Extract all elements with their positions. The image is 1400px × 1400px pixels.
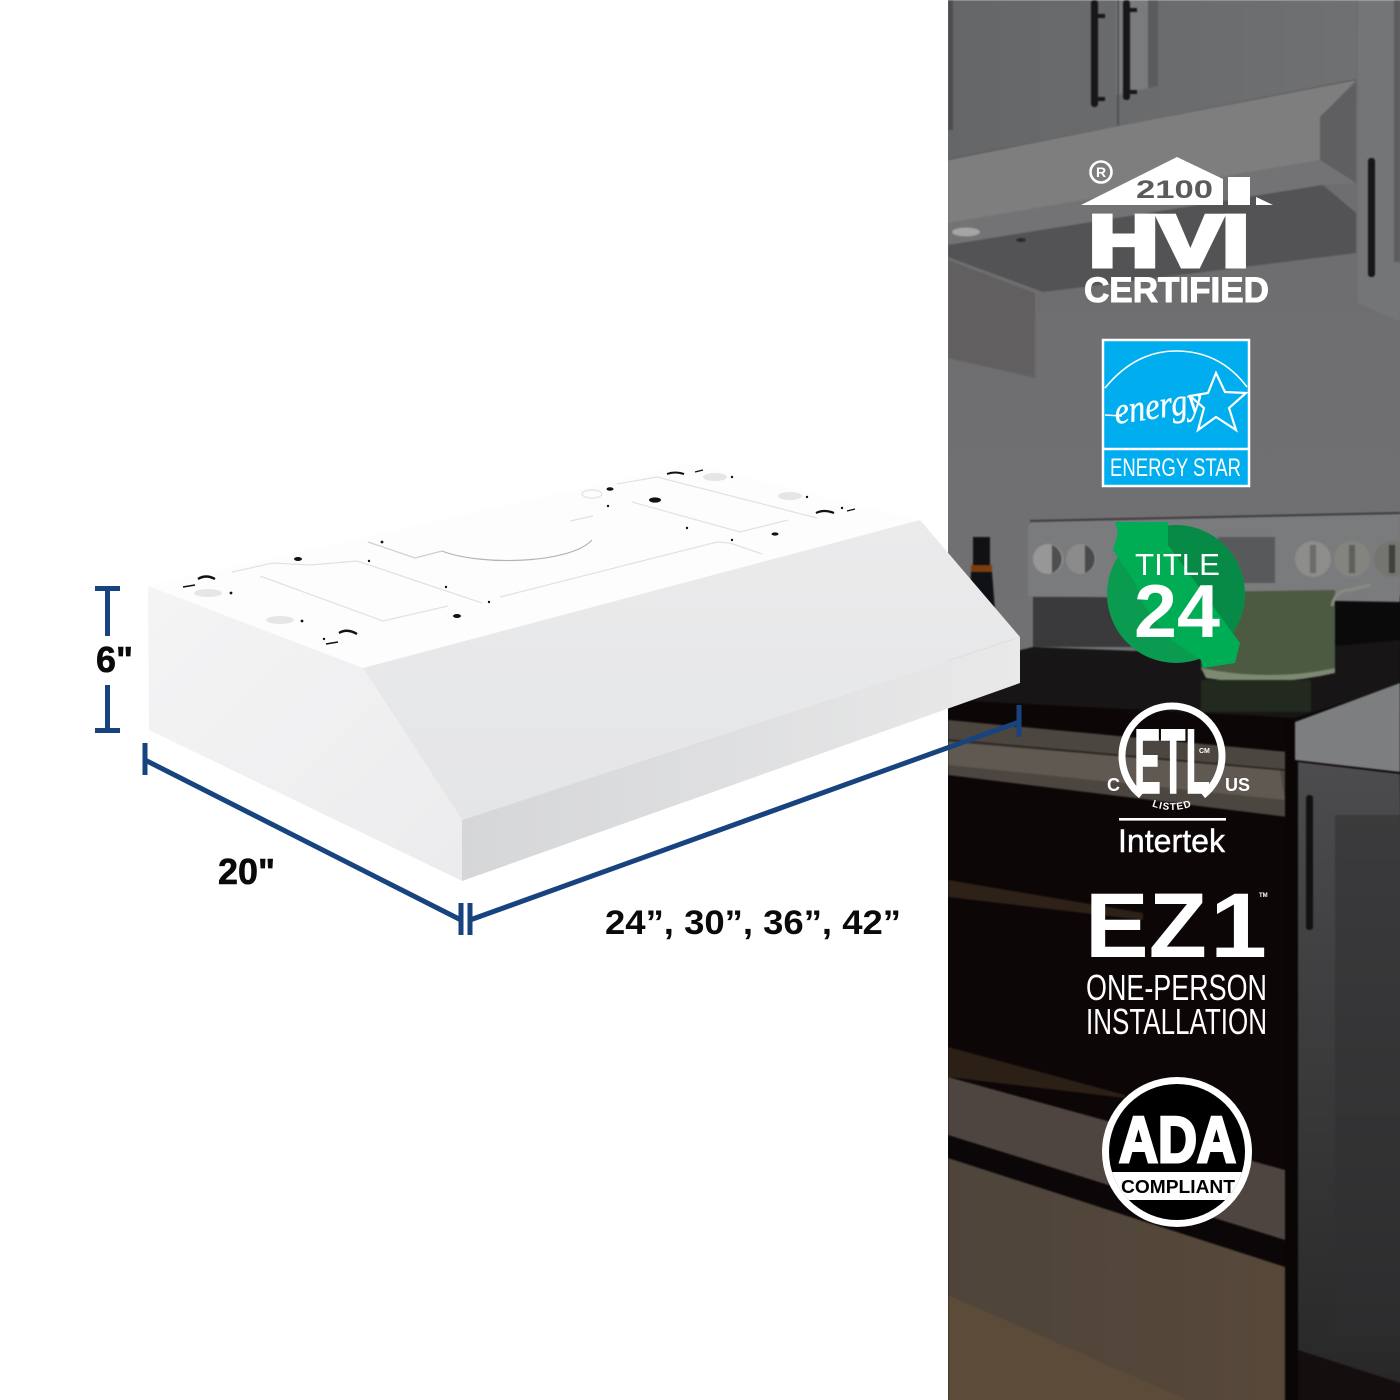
badge: Title 24: TITLE xyxy=(1135,547,1220,582)
oven window reflection xyxy=(948,880,1143,920)
dimension: height 6 inches xyxy=(95,586,133,733)
green pot xyxy=(1201,585,1370,712)
dimension: width options xyxy=(470,705,1019,942)
badge: ADA compliant: ADA xyxy=(1119,1103,1236,1176)
badge: ADA compliant xyxy=(1100,1077,1254,1227)
oven drawer panels xyxy=(948,720,1298,1400)
wall shelf box xyxy=(948,260,1035,378)
hood left side face xyxy=(148,586,462,881)
lower right cabinet xyxy=(1298,762,1400,1400)
product: range hood xyxy=(148,463,1020,881)
upper cabinet doors xyxy=(948,0,1357,160)
badge: ETL listed Intertek: C xyxy=(1107,775,1120,795)
badge: ETL listed Intertek: LISTED xyxy=(1152,800,1190,810)
right counter xyxy=(1295,683,1400,772)
top surface panel lines xyxy=(232,477,817,621)
hood sloped front face xyxy=(363,520,1020,820)
badge: ETL listed Intertek: ETL xyxy=(1134,711,1210,813)
stove control panel xyxy=(1028,513,1400,602)
dimension: depth 20 inches: 20" xyxy=(218,851,275,892)
badge: HVI 2100 certified: R xyxy=(1096,164,1106,180)
badge: EZ1 one-person installation xyxy=(1085,875,1268,1042)
mounting holes xyxy=(183,470,855,644)
badge: EZ1 one-person installation: TM xyxy=(1259,893,1268,899)
panel: kitchen photo background xyxy=(940,0,1400,1400)
badge: Energy Star xyxy=(1103,340,1249,486)
badge: Energy Star: energy xyxy=(1111,379,1205,433)
cooktop and oven body xyxy=(971,596,1400,718)
badge: EZ1 one-person installation: INSTALLATION xyxy=(1086,1001,1267,1042)
badge: Title 24: 24 xyxy=(1134,569,1220,653)
badge: ETL listed Intertek: CM xyxy=(1199,748,1210,755)
right cabinet with handle xyxy=(1358,0,1400,278)
mounting pads xyxy=(194,473,802,624)
over-range hood in photo xyxy=(948,80,1356,292)
badge: ETL listed Intertek: Intertek xyxy=(1118,823,1226,859)
badge: HVI 2100 certified: HVI xyxy=(1089,202,1249,282)
badge: Energy Star: ENERGY STAR xyxy=(1110,454,1241,482)
badge: EZ1 one-person installation: ONE-PERSON xyxy=(1086,967,1267,1008)
dimension: depth 20 inches xyxy=(145,743,461,935)
hood front lip xyxy=(462,637,1020,881)
badge: HVI 2100 certified: CERTIFIED xyxy=(1084,271,1269,310)
hood top surface xyxy=(148,463,921,668)
oven door handle xyxy=(948,720,1288,817)
badge: ETL listed Intertek xyxy=(1107,702,1250,859)
dimension: width options: 24”, 30”, 36”, 42” xyxy=(605,904,901,942)
badge: Title 24 xyxy=(1107,522,1245,668)
badge: HVI 2100 certified xyxy=(1081,157,1273,310)
bottle xyxy=(969,537,995,610)
badge: EZ1 one-person installation: EZ xyxy=(1085,875,1207,977)
badge: HVI 2100 certified: 2100 xyxy=(1136,176,1213,204)
badge: EZ1 one-person installation: 1 xyxy=(1210,875,1267,977)
badge: ETL listed Intertek: US xyxy=(1225,775,1250,795)
dimension: height 6 inches: 6" xyxy=(96,639,133,680)
badge: ADA compliant: COMPLIANT xyxy=(1121,1177,1235,1197)
